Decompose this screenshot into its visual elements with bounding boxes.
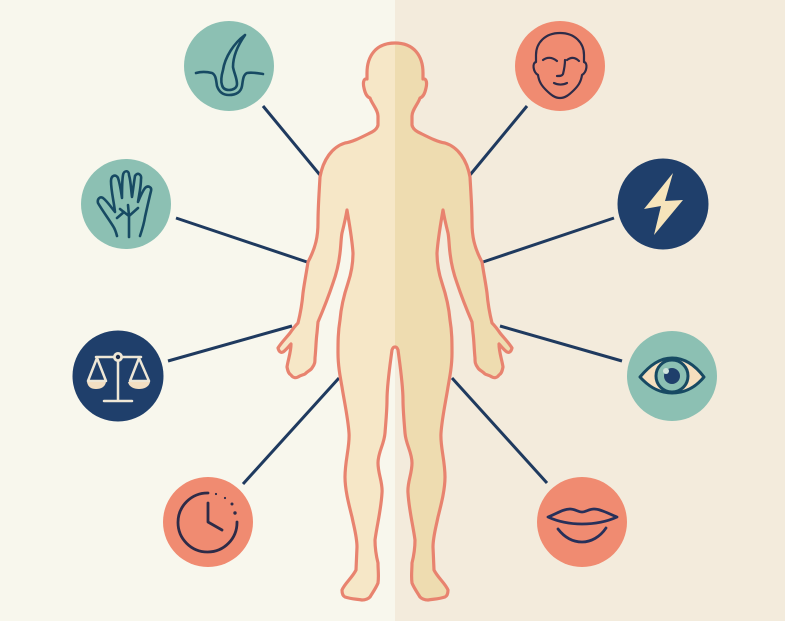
icon: balance scales — [72, 330, 164, 422]
icon: face — [515, 21, 605, 111]
icon: lightning bolt — [618, 158, 708, 250]
icon: hand with veins — [81, 159, 171, 249]
connector lines — [168, 106, 622, 484]
human body figure — [278, 43, 512, 600]
icon: clock — [163, 477, 253, 567]
icon: hair follicle — [184, 21, 274, 111]
icon: eye — [627, 331, 717, 421]
icon: lips — [537, 477, 627, 567]
